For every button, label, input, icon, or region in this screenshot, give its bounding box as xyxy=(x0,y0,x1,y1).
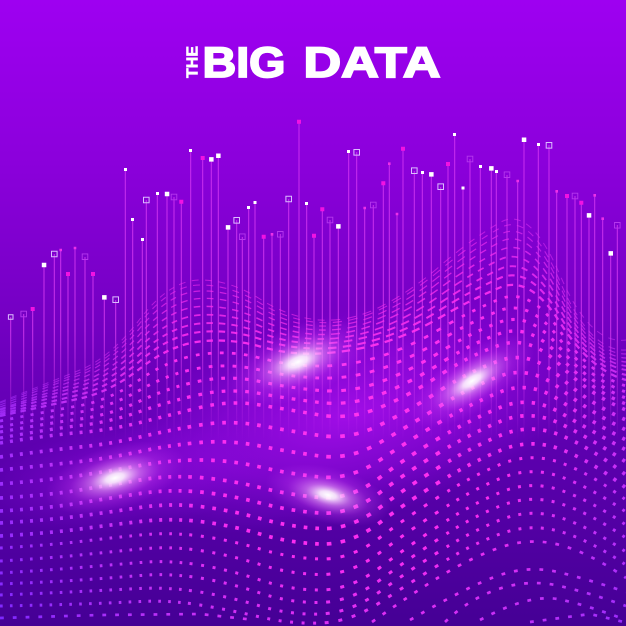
markers: small pink squares xyxy=(59,162,604,251)
mesh: crest rows xyxy=(0,219,626,416)
markers: dark hollow squares xyxy=(21,156,620,317)
markers: large pink squares xyxy=(31,120,583,311)
title xyxy=(185,39,440,87)
data spike lines xyxy=(11,122,617,440)
title: DATA: DATA xyxy=(304,39,440,87)
spike markers xyxy=(8,120,620,319)
title: BIG: BIG xyxy=(202,39,286,87)
mesh: middle rows xyxy=(0,358,626,544)
markers: large white squares xyxy=(42,138,613,300)
wave dot mesh xyxy=(0,219,626,623)
glow spot: bottom centre xyxy=(259,452,397,538)
mesh: partial rows at the bottom edge xyxy=(0,542,626,622)
markers: small white squares xyxy=(124,133,540,241)
mesh: upper rows xyxy=(0,296,626,443)
broad light band across the wave xyxy=(0,253,618,577)
glow spot: top centre xyxy=(214,300,382,424)
glow spot: right xyxy=(395,317,549,445)
markers: light hollow squares xyxy=(8,142,552,319)
mesh: lower rows xyxy=(0,458,626,623)
title: rotated word THE: THE xyxy=(185,46,202,78)
glow spot: left xyxy=(37,427,193,529)
